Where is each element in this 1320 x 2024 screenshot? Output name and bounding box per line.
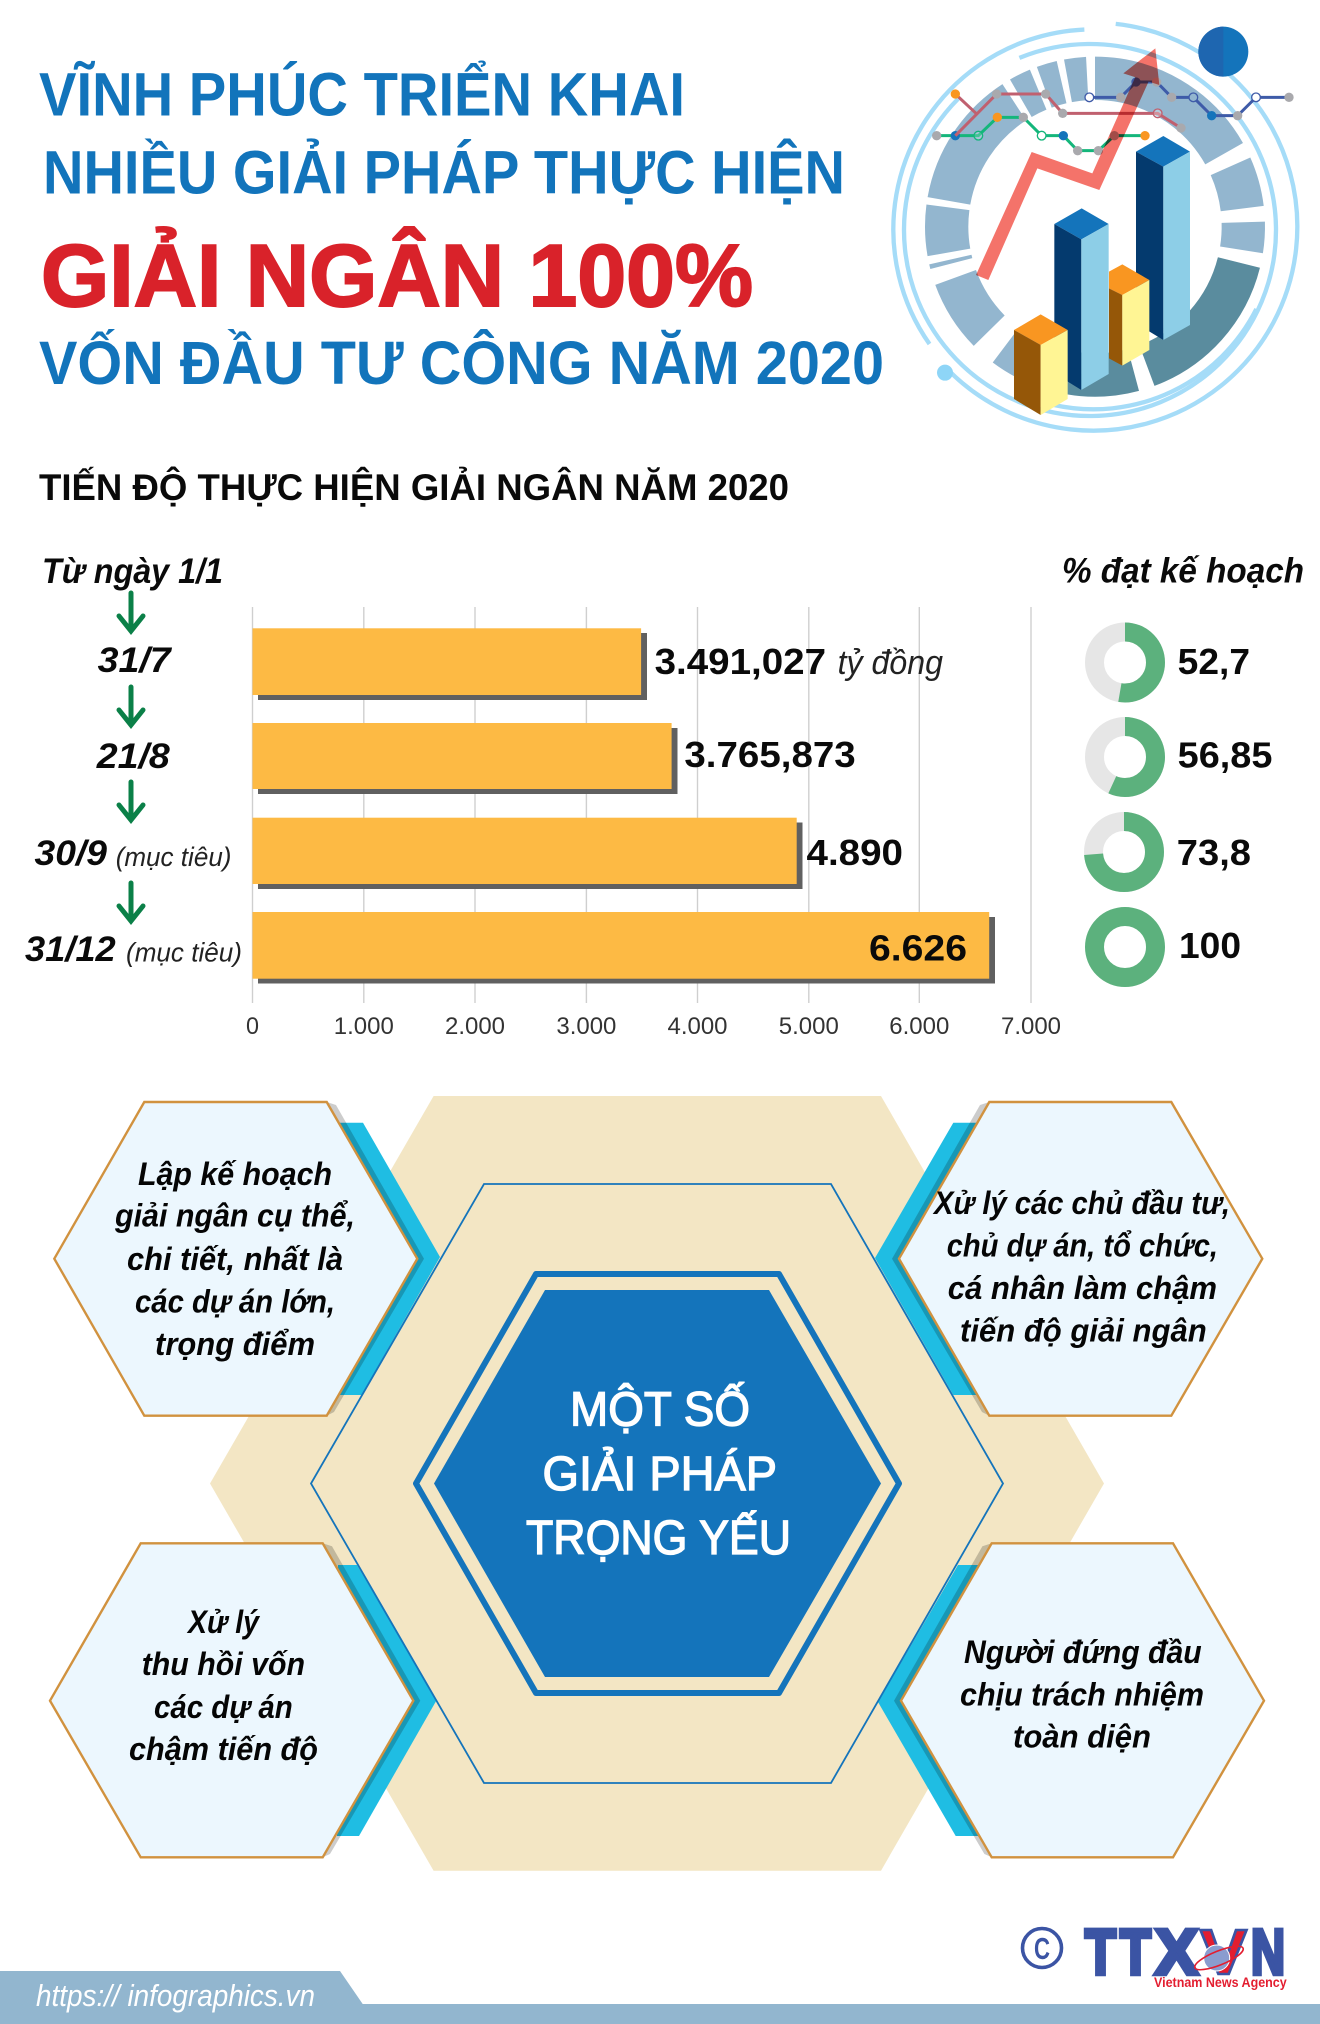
title: VĨNH PHÚC TRIỂN KHAI	[39, 61, 685, 129]
value labels: 3.765,873	[684, 734, 856, 775]
timeline: dates and arrows: 30/9	[34, 834, 108, 873]
axis tick labels: 6.000	[889, 1013, 949, 1040]
percent of plan column: % đạt kế hoạch	[1062, 552, 1304, 591]
panel: responsibility hexagon bottom-right: chịu trách nhiệm	[960, 1677, 1204, 1713]
logo: TTXVN: T	[1120, 1916, 1151, 1988]
cyan chevrons behind side hexagons	[337, 1123, 978, 1836]
axis tick labels: 3.000	[556, 1013, 616, 1040]
value labels: 3.491,027	[655, 641, 826, 682]
value labels: 6.626	[869, 928, 967, 969]
middle orange bar	[1109, 264, 1149, 366]
central blue hexagon with heading	[434, 1290, 881, 1677]
value labels: 4.890	[806, 832, 903, 873]
percent of plan column: 73,8	[1177, 832, 1251, 873]
timeline: dates and arrows: 21/8	[96, 737, 170, 776]
timeline: dates and arrows: (mục tiêu)	[126, 938, 242, 968]
title: NHIỀU GIẢI PHÁP THỰC HIỆN	[43, 138, 845, 206]
copyright icon: C	[1034, 1931, 1050, 1966]
arrow	[119, 883, 143, 921]
green line series	[932, 113, 1150, 155]
axis tick labels	[246, 1013, 1061, 1040]
value labels	[655, 641, 967, 969]
logo: TTXVN: T	[1085, 1916, 1116, 1988]
front orange bar	[1014, 314, 1068, 415]
percent of plan column: 100	[1179, 925, 1241, 966]
timeline: dates and arrows: 31/7	[98, 641, 172, 680]
panel: handling investors hexagon top-right	[892, 1102, 1262, 1416]
bar chart: disbursement progress	[246, 607, 1061, 1040]
panel: responsibility hexagon bottom-right	[894, 1543, 1264, 1857]
section heading: TIẾN ĐỘ THỰC HIỆN GIẢI NGÂN NĂM 2020	[39, 466, 789, 508]
footer band with website	[0, 1971, 1320, 2024]
panel: recovery hexagon bottom-left: Xử lý	[186, 1604, 261, 1640]
axis tick labels: 0	[246, 1013, 259, 1040]
bar 21/8	[252, 723, 678, 794]
panel: plan hexagon top-left: giải ngân cụ thể,	[114, 1198, 355, 1234]
arrow	[119, 593, 143, 631]
axis tick labels: 4.000	[668, 1013, 728, 1040]
central blue hexagon with heading: MỘT SỐ	[570, 1382, 750, 1437]
tall blue bar	[1136, 136, 1190, 340]
logo: TTXVN	[1085, 1916, 1287, 1990]
orbit end dot	[937, 365, 953, 381]
footer band with website: https:// infographics.vn	[36, 1978, 315, 2013]
central blue hexagon with heading: GIẢI PHÁP	[542, 1446, 777, 1501]
panel: recovery hexagon bottom-left: các dự án	[154, 1689, 293, 1725]
title: VỐN ĐẦU TƯ CÔNG NĂM 2020	[39, 329, 884, 397]
panel: recovery hexagon bottom-left: thu hồi vốn	[142, 1646, 305, 1682]
rising red arrow	[976, 48, 1159, 280]
donut 100	[1094, 916, 1156, 978]
middle blue bar	[1054, 208, 1109, 390]
timeline: dates and arrows: (mục tiêu)	[116, 842, 232, 872]
panel: plan hexagon top-left: trọng điểm	[155, 1326, 315, 1362]
logo: TTXVN: Vietnam News Agency	[1154, 1974, 1287, 1990]
percent of plan column: 56,85	[1178, 734, 1272, 775]
logo: TTXVN: N	[1251, 1916, 1285, 1988]
panel: recovery hexagon bottom-left: chậm tiến độ	[129, 1731, 318, 1767]
timeline: dates and arrows: 31/12	[25, 930, 116, 969]
panel: recovery hexagon bottom-left	[50, 1543, 420, 1857]
thin outlined hexagon	[311, 1184, 1003, 1783]
bar 31/12	[252, 912, 995, 984]
panel: plan hexagon top-left: các dự án lớn,	[135, 1283, 335, 1319]
percent of plan column: 52,7	[1178, 641, 1250, 682]
light blue orbit lines	[815, 0, 1320, 508]
title: GIẢI NGÂN 100%	[41, 226, 753, 325]
panel: responsibility hexagon bottom-right: toàn diện	[1013, 1719, 1151, 1755]
axis tick labels: 1.000	[334, 1013, 394, 1040]
thick outlined hexagon	[416, 1274, 899, 1693]
panel: plan hexagon top-left: Lập kế hoạch	[138, 1156, 332, 1192]
panel: handling investors hexagon top-right: chủ dự án, tổ chức,	[947, 1228, 1218, 1264]
panel: handling investors hexagon top-right: tiến độ giải ngân	[960, 1313, 1207, 1349]
panel: plan hexagon top-left: chi tiết, nhất là	[127, 1241, 343, 1277]
donut 73,8	[1094, 822, 1154, 882]
panel: responsibility hexagon bottom-right: Người đứng đầu	[964, 1634, 1202, 1670]
axis tick labels: 5.000	[779, 1013, 839, 1040]
axis tick labels: 7.000	[1001, 1013, 1061, 1040]
percent of plan column	[1062, 552, 1304, 978]
value labels: tỷ đồng	[838, 644, 943, 682]
copyright icon	[1022, 1928, 1062, 1968]
panel: handling investors hexagon top-right: Xử lý các chủ đầu tư,	[932, 1185, 1230, 1221]
arrow	[119, 687, 143, 725]
arrow	[119, 782, 143, 820]
ring segments	[885, 17, 1305, 436]
panel: handling investors hexagon top-right: cá nhân làm chậm	[948, 1270, 1217, 1306]
blue line series	[1085, 77, 1294, 120]
central hexagon backdrop	[210, 1096, 1104, 1871]
donut 56,85	[1094, 726, 1156, 788]
illustration: growth chart in circular rings	[815, 0, 1320, 508]
central blue hexagon with heading: TRỌNG YẾU	[526, 1511, 791, 1565]
axis tick labels: 2.000	[445, 1013, 505, 1040]
title	[39, 61, 884, 397]
red line series	[951, 89, 1186, 136]
bar 31/7	[252, 628, 647, 700]
timeline: dates and arrows: Từ ngày 1/1	[42, 552, 223, 591]
logo: TTXVN: X	[1155, 1916, 1198, 1988]
panel: plan hexagon top-left	[54, 1102, 424, 1416]
timeline: dates and arrows	[25, 552, 242, 969]
blue sun circle	[1198, 27, 1248, 77]
logo: TTXVN: V	[1200, 1916, 1247, 1988]
donut 52,7	[1094, 632, 1156, 693]
bar 30/9	[252, 818, 802, 889]
